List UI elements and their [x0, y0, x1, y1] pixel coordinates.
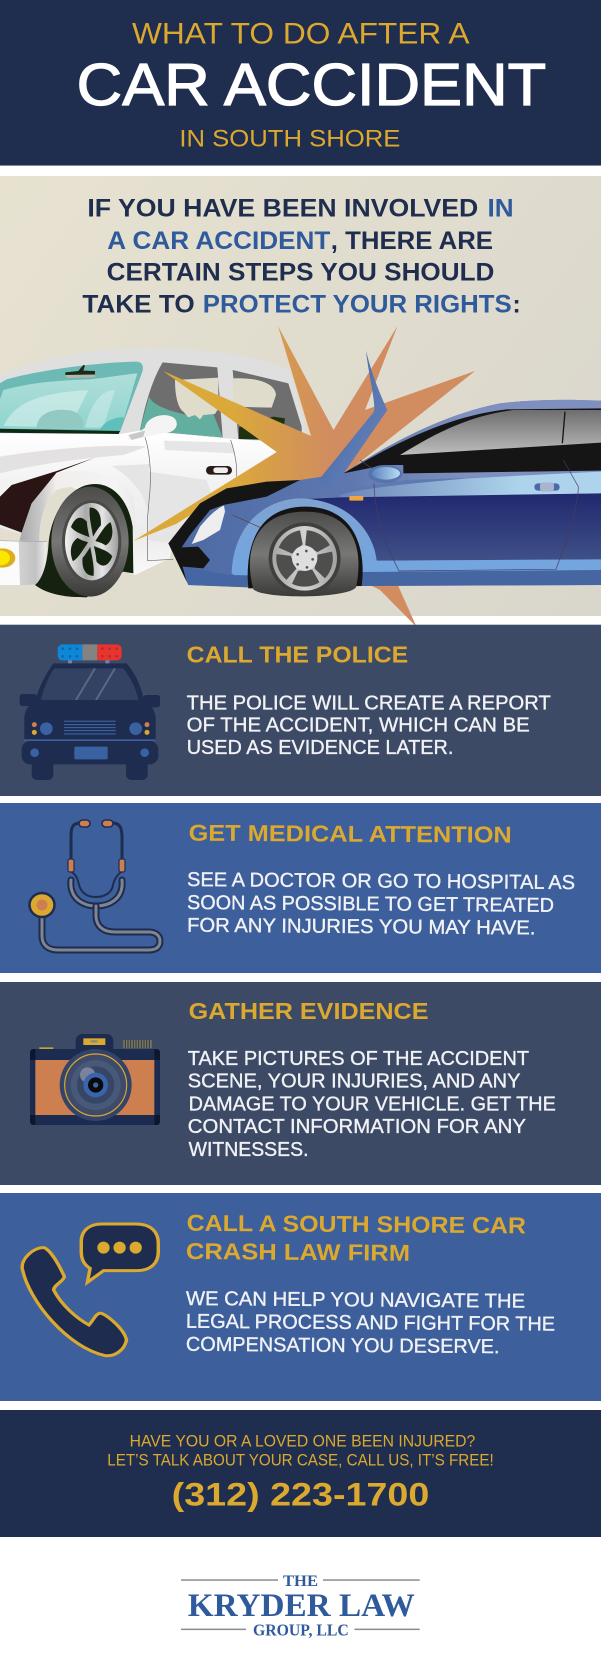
- phone number: (312) 223-1700: [172, 1476, 429, 1512]
- body text: USED AS EVIDENCE LATER.: [187, 737, 453, 759]
- call to action text: HAVE YOU OR A LOVED ONE BEEN INJURED?: [130, 1432, 475, 1451]
- logo: the kryder law group: THE: [283, 1573, 318, 1590]
- heading: CRASH LAW FIRM: [186, 1238, 410, 1266]
- intro text: CERTAIN STEPS YOU SHOULD: [107, 260, 494, 287]
- footer call to action: [0, 1410, 601, 1537]
- panel: call the police: [0, 625, 601, 796]
- call to action text: [107, 1432, 494, 1470]
- intro text: IN: [488, 196, 514, 223]
- intro text: IF YOU HAVE BEEN INVOLVED: [87, 196, 478, 223]
- body text: SOON AS POSSIBLE TO GET TREATED: [187, 892, 554, 917]
- logo: the kryder law group: [181, 1573, 420, 1639]
- call to action text: LET’S TALK ABOUT YOUR CASE, CALL US, IT’S FREE!: [107, 1451, 494, 1470]
- body text: LEGAL PROCESS AND FIGHT FOR THE: [186, 1311, 555, 1336]
- body text: CONTACT INFORMATION FOR ANY: [188, 1116, 526, 1138]
- intro text: A CAR ACCIDENT: [107, 228, 330, 255]
- body text: OF THE ACCIDENT, WHICH CAN BE: [187, 714, 530, 736]
- heading: GATHER EVIDENCE: [189, 998, 428, 1024]
- panel: call a law firm: [0, 1193, 601, 1401]
- logo: the kryder law group: KRYDER LAW: [188, 1588, 415, 1624]
- intro text: TAKE TO: [82, 292, 195, 319]
- icon: police car: [20, 644, 160, 780]
- heading: CALL THE POLICE: [187, 642, 408, 668]
- icon: stethoscope: [30, 820, 160, 950]
- intro text: :: [512, 292, 521, 319]
- illustration: blue car: [168, 351, 601, 596]
- panel: hero with crashed cars: [0, 176, 601, 627]
- body text: DAMAGE TO YOUR VEHICLE. GET THE: [189, 1093, 556, 1115]
- body text: SEE A DOCTOR OR GO TO HOSPITAL AS: [187, 869, 575, 894]
- body text: COMPENSATION YOU DESERVE.: [186, 1334, 500, 1358]
- title: car accident: CAR ACCIDENT: [77, 52, 546, 118]
- title line: in south shore: IN SOUTH SHORE: [179, 126, 400, 153]
- heading: GET MEDICAL ATTENTION: [189, 820, 512, 848]
- body text: FOR ANY INJURIES YOU MAY HAVE.: [187, 915, 536, 939]
- body text: SCENE, YOUR INJURIES, AND ANY: [188, 1071, 521, 1093]
- panel: gather evidence: [0, 982, 601, 1185]
- intro text: , THERE ARE: [331, 228, 493, 255]
- body text: [186, 1288, 555, 1358]
- icon: phone and speech bubble: [22, 1224, 158, 1356]
- body text: THE POLICE WILL CREATE A REPORT: [187, 692, 551, 714]
- body text: [188, 1048, 556, 1161]
- heading: CALL A SOUTH SHORE CAR: [187, 1210, 526, 1238]
- illustration: white car: [0, 348, 305, 597]
- panel: get medical attention: [0, 803, 601, 973]
- illustration: impact burst: [133, 326, 475, 627]
- icon: camera: [30, 1034, 160, 1125]
- heading: [186, 1210, 526, 1266]
- body text: WITNESSES.: [189, 1139, 308, 1161]
- body text: [187, 869, 575, 939]
- intro text: PROTECT YOUR RIGHTS: [203, 292, 512, 319]
- title line: what to do after a: WHAT TO DO AFTER A: [132, 17, 470, 50]
- body text: WE CAN HELP YOU NAVIGATE THE: [186, 1288, 525, 1313]
- header banner: [0, 0, 601, 166]
- logo: the kryder law group: GROUP, LLC: [253, 1620, 349, 1639]
- intro text: [82, 196, 521, 319]
- body text: TAKE PICTURES OF THE ACCIDENT: [188, 1048, 529, 1070]
- body text: [187, 692, 551, 759]
